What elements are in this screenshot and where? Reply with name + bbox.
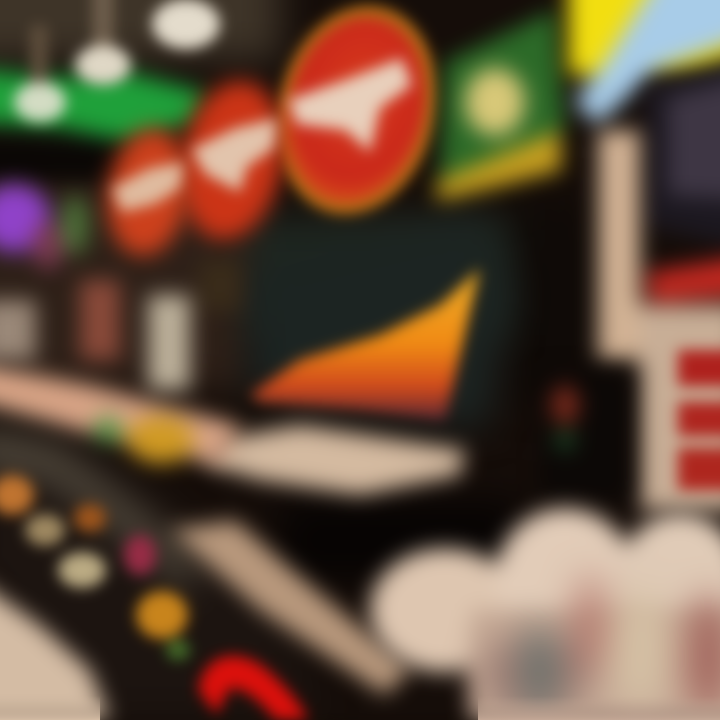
icon: console buttons: [0, 475, 190, 660]
panel: yellow and light blue corner: [568, 0, 720, 125]
panel: bottom edge colour fill right: [478, 696, 720, 720]
chart: central monitor with orange area: [250, 218, 510, 430]
panel: pink and grey figure details: [480, 575, 720, 720]
panel: diagonal dark console: [0, 425, 320, 720]
panel: upper wall tones: [0, 0, 590, 580]
panel: cream column and cabinet: [598, 130, 720, 510]
panel: cream blob bottom left: [0, 575, 110, 720]
icon: middle red ticker badge: [169, 73, 295, 247]
panel: vertical stands under badges: [0, 260, 240, 390]
panel: keyboard on desk: [210, 425, 465, 495]
panel: green and yellow sign: [436, 10, 565, 202]
icon: ceiling lamps: [14, 0, 220, 122]
icon: red telephone handset: [198, 656, 308, 720]
icon: small red ticker badge: [99, 123, 197, 261]
panel: right dark monitor: [645, 50, 720, 250]
panel: cream clouds bottom right: [370, 508, 720, 720]
panel: cream desk edge left: [0, 362, 240, 465]
panel: red cabinet drawers: [678, 350, 720, 490]
panel: green shelf band: [0, 68, 205, 180]
icon: small traffic light indicator: [540, 370, 630, 500]
panel: bottom edge colour fill left: [0, 696, 100, 720]
panel: diagonal cream strip: [170, 520, 410, 695]
icon: purple light: [0, 184, 89, 269]
icon: large red ticker badge: [256, 0, 458, 232]
